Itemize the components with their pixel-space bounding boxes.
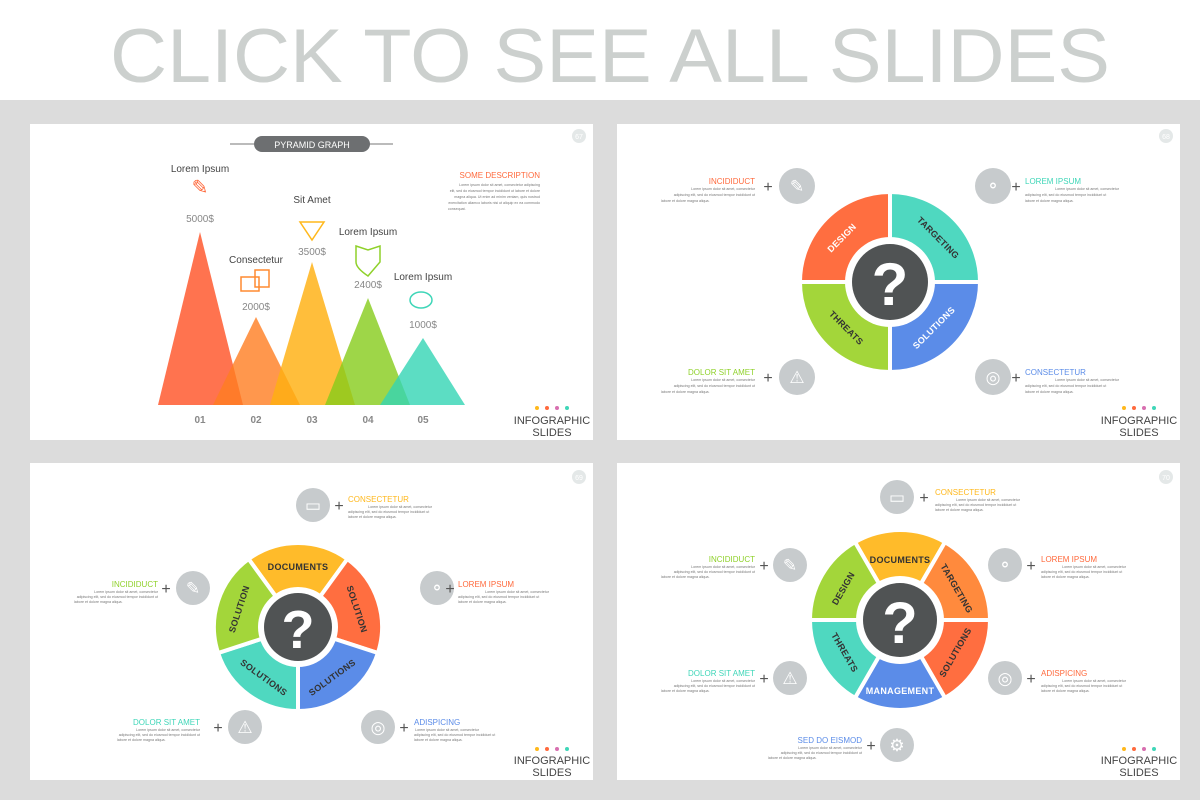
item: lorem ipsum: labore et dolore magna aliqua. <box>1025 199 1074 203</box>
item: lorem ipsum: Lorem ipsum dolor sit amet, consectetur <box>485 590 550 594</box>
item: consectetur: labore et dolore magna aliqua. <box>348 515 397 519</box>
item: sed do eismod: SED DO EISMOD <box>798 736 862 745</box>
page number 67 <box>572 129 586 143</box>
item: dolor sit amet: adipiscing elit, sed do eiusmod tempor incididunt ut <box>119 733 200 737</box>
pyramid chart: 04 <box>362 415 374 426</box>
labels: pyramid values: Lorem Ipsum <box>394 272 452 283</box>
circle chart: 4 segments: SOLUTIONS <box>911 305 957 351</box>
circle chart: 6 segments: ? <box>882 591 918 656</box>
logo: SLIDES <box>532 767 572 779</box>
item: lorem ipsum: adipiscing elit, sed do eiusmod tempor incididunt ut <box>458 595 539 599</box>
item: consectetur: CONSECTETUR <box>935 488 996 497</box>
item: lorem ipsum: LOREM IPSUM <box>1025 177 1081 186</box>
item: incididuct: adipiscing elit, sed do eiusmod tempor incididunt ut <box>674 193 755 197</box>
description text: magna aliqua. Ut enim ad minim veniam, quis nostrud <box>454 195 540 199</box>
item: adispicing: + <box>399 720 409 737</box>
item: lorem ipsum: + <box>1011 179 1021 196</box>
item: incididuct: labore et dolore magna aliqua. <box>74 600 123 604</box>
item: lorem ipsum <box>420 571 550 605</box>
item: adispicing: adipiscing elit, sed do eiusmod tempor incididunt ut <box>414 733 495 737</box>
item: consectetur <box>296 488 433 522</box>
item: sed do eismod: labore et dolore magna aliqua. <box>768 756 817 760</box>
logo: SLIDES <box>1119 427 1159 439</box>
item: consectetur: labore et dolore magna aliqua. <box>1025 390 1074 394</box>
item: consectetur <box>975 359 1120 395</box>
item: consectetur: Lorem ipsum dolor sit amet, consectetur <box>956 498 1021 502</box>
item: consectetur: + <box>919 490 929 507</box>
item: dolor sit amet: adipiscing elit, sed do eiusmod tempor incididunt ut <box>674 384 755 388</box>
item: incididuct: adipiscing elit, sed do eiusmod tempor incididunt ut <box>77 595 158 599</box>
item: dolor sit amet: Lorem ipsum dolor sit amet, consectetur <box>136 728 201 732</box>
item: consectetur: CONSECTETUR <box>1025 368 1086 377</box>
item: sed do eismod: ⚙ <box>889 736 905 755</box>
item: lorem ipsum: adipiscing elit, sed do eiusmod tempor incididunt ut <box>1025 193 1106 197</box>
heading pill: pyramid graph: PYRAMID GRAPH <box>274 140 350 150</box>
item: dolor sit amet: labore et dolore magna aliqua. <box>117 738 166 742</box>
item: incididuct: INCIDIDUCT <box>709 177 755 186</box>
circle chart: 5 segments: SOLUTION <box>227 584 251 634</box>
page number 68 <box>1159 129 1173 143</box>
item: consectetur: + <box>334 498 344 515</box>
item: adispicing: Lorem ipsum dolor sit amet, consectetur <box>1062 679 1127 683</box>
labels: pyramid values: ✎ <box>192 177 208 199</box>
item: dolor sit amet: ⚠ <box>789 368 805 387</box>
logo: SLIDES <box>1119 767 1159 779</box>
page number 70 <box>1159 470 1173 484</box>
item: incididuct: Lorem ipsum dolor sit amet, consectetur <box>691 565 756 569</box>
item: lorem ipsum <box>988 548 1127 582</box>
circle chart: 4 segments: THREATS <box>827 309 865 347</box>
item: consectetur: adipiscing elit, sed do eiusmod tempor incididunt ut <box>1025 384 1106 388</box>
item: lorem ipsum: adipiscing elit, sed do eiusmod tempor incididunt ut <box>1041 570 1122 574</box>
item: consectetur: ◎ <box>986 368 1000 387</box>
item: adispicing: ◎ <box>998 669 1012 688</box>
item: adispicing: Lorem ipsum dolor sit amet, consectetur <box>415 728 480 732</box>
item: lorem ipsum: + <box>1026 558 1036 575</box>
item: consectetur: Lorem ipsum dolor sit amet, consectetur <box>1055 378 1120 382</box>
labels: pyramid values <box>171 164 452 331</box>
item: dolor sit amet: + <box>213 720 223 737</box>
logo <box>514 406 590 439</box>
pyramid chart <box>158 232 465 426</box>
item: incididuct: + <box>161 581 171 598</box>
item: consectetur: adipiscing elit, sed do eiusmod tempor incididunt ut <box>348 510 429 514</box>
item: dolor sit amet: Lorem ipsum dolor sit amet, consectetur <box>691 679 756 683</box>
panel: four-part circle slide <box>617 124 1180 440</box>
logo: INFOGRAPHIC <box>1101 755 1177 767</box>
circle chart: 6 segments: TARGETING <box>939 562 975 615</box>
logo: INFOGRAPHIC <box>514 755 590 767</box>
circle chart: 4 segments <box>800 192 980 372</box>
item: incididuct <box>74 571 210 605</box>
pyramid chart: 01 <box>194 415 206 426</box>
item: lorem ipsum: + <box>445 581 455 598</box>
item: dolor sit amet: DOLOR SIT AMET <box>133 718 200 727</box>
item: dolor sit amet: Lorem ipsum dolor sit amet, consectetur <box>691 378 756 382</box>
page number 67: 67 <box>575 134 583 141</box>
item: consectetur: CONSECTETUR <box>348 495 409 504</box>
labels: pyramid values: 1000$ <box>409 320 437 331</box>
page number 68: 68 <box>1162 134 1170 141</box>
item: incididuct <box>661 168 815 204</box>
item: lorem ipsum: Lorem ipsum dolor sit amet, consectetur <box>1062 565 1127 569</box>
item: dolor sit amet: + <box>763 370 773 387</box>
labels: pyramid values: Lorem Ipsum <box>339 227 397 238</box>
logo <box>1101 747 1177 779</box>
item: dolor sit amet: ⚠ <box>782 669 798 688</box>
item: lorem ipsum: ⚬ <box>986 177 1000 196</box>
item: adispicing: ADISPICING <box>1041 669 1087 678</box>
item: dolor sit amet: labore et dolore magna aliqua. <box>661 390 710 394</box>
item: sed do eismod <box>768 728 914 762</box>
labels: pyramid values: 5000$ <box>186 214 214 225</box>
item: consectetur: adipiscing elit, sed do eiusmod tempor incididunt ut <box>935 503 1016 507</box>
item: adispicing <box>361 710 495 744</box>
labels: pyramid values: Sit Amet <box>293 195 331 206</box>
circle chart: 4 segments: TARGETING <box>915 215 961 261</box>
item: lorem ipsum: ⚬ <box>998 556 1012 575</box>
circle chart: 4 segments: DESIGN <box>826 222 858 254</box>
pyramid chart: 02 <box>250 415 262 426</box>
circle chart: 5 segments: DOCUMENTS <box>268 562 328 572</box>
item: adispicing: labore et dolore magna aliqua. <box>414 738 463 742</box>
item: lorem ipsum: ⚬ <box>430 579 444 598</box>
item: incididuct: adipiscing elit, sed do eiusmod tempor incididunt ut <box>674 570 755 574</box>
item: incididuct: Lorem ipsum dolor sit amet, consectetur <box>691 187 756 191</box>
item: dolor sit amet: labore et dolore magna aliqua. <box>661 689 710 693</box>
description text <box>448 171 540 211</box>
labels: pyramid values: 2400$ <box>354 280 382 291</box>
description text: elit, sed do eiusmod tempor incididunt ut labore et dolore <box>450 189 540 193</box>
item: dolor sit amet <box>117 710 262 744</box>
item: incididuct: ✎ <box>186 579 200 598</box>
item: consectetur: Lorem ipsum dolor sit amet, consectetur <box>368 505 433 509</box>
pyramid chart: 05 <box>417 415 429 426</box>
item: dolor sit amet: DOLOR SIT AMET <box>688 368 755 377</box>
item: consectetur: ▭ <box>305 496 321 515</box>
item: adispicing: adipiscing elit, sed do eiusmod tempor incididunt ut <box>1041 684 1122 688</box>
pyramid chart: 03 <box>306 415 318 426</box>
item: incididuct: labore et dolore magna aliqua. <box>661 575 710 579</box>
item: consectetur: + <box>1011 370 1021 387</box>
page number 69: 69 <box>575 475 583 482</box>
item: dolor sit amet: DOLOR SIT AMET <box>688 669 755 678</box>
item: incididuct: ✎ <box>783 556 797 575</box>
item: dolor sit amet: adipiscing elit, sed do eiusmod tempor incididunt ut <box>674 684 755 688</box>
labels: pyramid values: 2000$ <box>242 302 270 313</box>
item: consectetur: ▭ <box>889 488 905 507</box>
circle chart: 5 segments: SOLUTION <box>345 584 369 634</box>
item: dolor sit amet <box>661 359 815 395</box>
item: incididuct: + <box>759 558 769 575</box>
circle chart: 6 segments: MANAGEMENT <box>866 686 934 696</box>
item: incididuct: ✎ <box>790 177 804 196</box>
item: lorem ipsum: Lorem ipsum dolor sit amet, consectetur <box>1055 187 1120 191</box>
item: incididuct <box>661 548 807 582</box>
page number 70: 70 <box>1162 475 1170 482</box>
item: incididuct: + <box>763 179 773 196</box>
labels: pyramid values: 3500$ <box>298 247 326 258</box>
panel: five-part circle slide <box>30 463 593 780</box>
item: lorem ipsum <box>975 168 1120 204</box>
item: consectetur: labore et dolore magna aliqua. <box>935 508 984 512</box>
description text: SOME DESCRIPTION <box>460 171 540 180</box>
description text: exercitation ullamco laboris nisi ut aliquip ex ea commodo <box>448 201 540 205</box>
circle chart: 5 segments: SOLUTIONS <box>238 657 289 698</box>
heading pill: pyramid graph <box>230 136 393 152</box>
item: lorem ipsum: labore et dolore magna aliqua. <box>458 600 507 604</box>
description text: consequat. <box>448 207 466 211</box>
circle chart: 5 segments: SOLUTIONS <box>307 657 358 698</box>
item: dolor sit amet: ⚠ <box>237 718 253 737</box>
item: incididuct: Lorem ipsum dolor sit amet, consectetur <box>94 590 159 594</box>
panel: pyramid graph slide <box>30 124 593 440</box>
circle chart: 5 segments: ? <box>282 600 314 660</box>
logo <box>1101 406 1177 439</box>
logo: INFOGRAPHIC <box>1101 415 1177 427</box>
item: adispicing <box>988 661 1127 695</box>
item: sed do eismod: + <box>866 738 876 755</box>
item: sed do eismod: adipiscing elit, sed do eiusmod tempor incididunt ut <box>781 751 862 755</box>
logo: INFOGRAPHIC <box>514 415 590 427</box>
item: sed do eismod: Lorem ipsum dolor sit amet, consectetur <box>798 746 863 750</box>
item: lorem ipsum: labore et dolore magna aliqua. <box>1041 575 1090 579</box>
panel: six-part circle slide <box>617 463 1180 780</box>
item: lorem ipsum: LOREM IPSUM <box>458 580 514 589</box>
item: incididuct: INCIDIDUCT <box>112 580 158 589</box>
circle chart: 5 segments <box>214 543 382 711</box>
item: lorem ipsum: LOREM IPSUM <box>1041 555 1097 564</box>
description text: Lorem ipsum dolor sit amet, consectetur adipiscing <box>459 183 540 187</box>
item: dolor sit amet <box>661 661 807 695</box>
item: dolor sit amet: + <box>759 671 769 688</box>
circle chart: 4 segments: ? <box>872 251 908 318</box>
item: adispicing: ADISPICING <box>414 718 460 727</box>
circle chart: 6 segments: DESIGN <box>830 570 857 607</box>
logo: SLIDES <box>532 427 572 439</box>
circle chart: 6 segments: SOLUTIONS <box>937 626 974 679</box>
item: adispicing: + <box>1026 671 1036 688</box>
title: CLICK TO SEE ALL SLIDES <box>110 14 1110 99</box>
circle chart: 6 segments <box>810 530 990 710</box>
circle chart: 6 segments: THREATS <box>829 631 860 674</box>
item: adispicing: ◎ <box>371 718 385 737</box>
labels: pyramid values: Consectetur <box>229 255 284 266</box>
labels: pyramid values: Lorem Ipsum <box>171 164 229 175</box>
item: adispicing: labore et dolore magna aliqua. <box>1041 689 1090 693</box>
item: incididuct: INCIDIDUCT <box>709 555 755 564</box>
item: incididuct: labore et dolore magna aliqua. <box>661 199 710 203</box>
circle chart: 6 segments: DOCUMENTS <box>870 555 930 565</box>
logo <box>514 747 590 779</box>
item: consectetur <box>880 480 1021 514</box>
page number 69 <box>572 470 586 484</box>
